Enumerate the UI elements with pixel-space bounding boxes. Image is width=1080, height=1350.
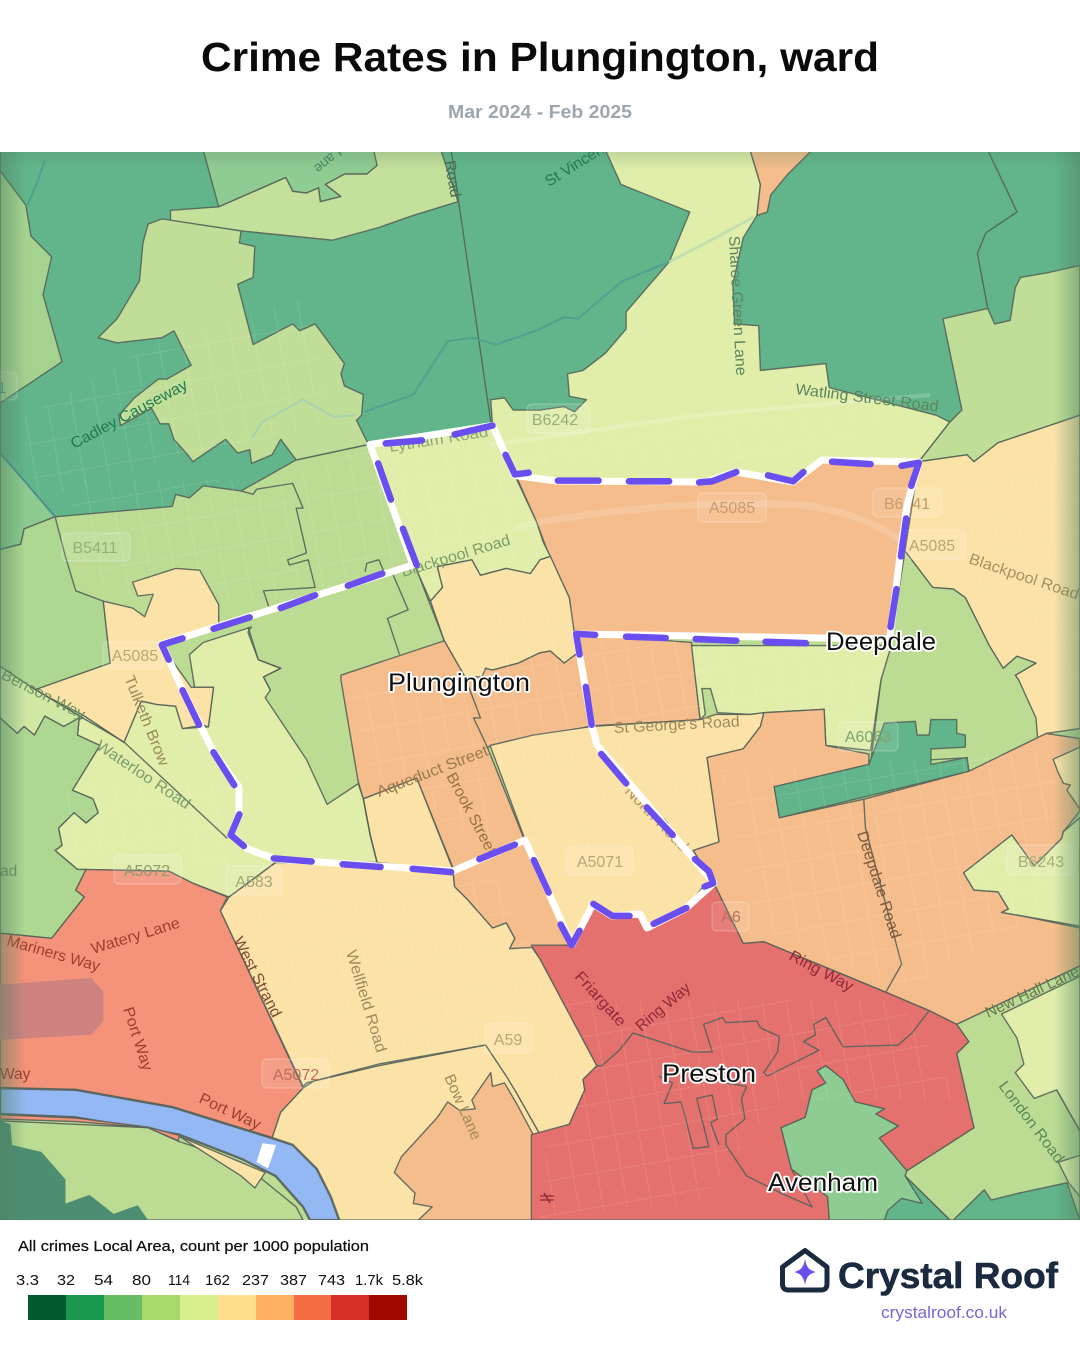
road and street labels: North Road bbox=[621, 783, 692, 855]
road and street labels: Ring Way bbox=[786, 948, 856, 996]
logo wordmark: Crystal Roof bbox=[838, 1255, 1059, 1296]
road and street labels: Deepdale Road bbox=[853, 829, 904, 941]
legend scale values bbox=[16, 1272, 424, 1289]
legend scale values: 114 bbox=[168, 1272, 190, 1289]
road and street labels: Mariners Way bbox=[5, 933, 102, 975]
road and street labels: Brook Street bbox=[442, 770, 500, 858]
website link: crystalroof.co.uk bbox=[881, 1304, 1008, 1322]
road number badges: A59 bbox=[494, 1032, 522, 1049]
ward boundary: Plungington bbox=[162, 426, 919, 945]
road number badges: A5072 bbox=[124, 863, 170, 880]
road and street labels: Sharoe Green Lane bbox=[725, 235, 749, 376]
road and street labels: Aqueduct Street bbox=[374, 742, 491, 801]
road and street labels: Road bbox=[441, 159, 464, 199]
road and street labels: New Hall Lane bbox=[983, 963, 1080, 1022]
road and street labels: Port Way bbox=[119, 1005, 156, 1073]
road and street labels: Tulketh Brow bbox=[120, 673, 172, 769]
street network texture bbox=[20, 300, 1080, 1218]
legend scale values: 1.7k bbox=[355, 1272, 383, 1289]
choropleth regions bbox=[0, 150, 1080, 1220]
road and street labels: West Strand bbox=[229, 934, 285, 1020]
road and street labels: Port Way bbox=[196, 1090, 264, 1134]
legend scale values: 54 bbox=[94, 1272, 113, 1289]
road number badges: A6 bbox=[721, 909, 741, 926]
road and street labels: ad bbox=[0, 863, 17, 880]
legend title: All crimes Local Area, count per 1000 population bbox=[18, 1238, 369, 1255]
road and street labels: Waterloo Road bbox=[93, 737, 193, 813]
road and street labels: St George's Road bbox=[613, 713, 740, 737]
road and street labels: Watery Lane bbox=[89, 915, 182, 958]
road and street labels: Blackpool Road bbox=[399, 532, 512, 581]
road number badges: A6063 bbox=[845, 729, 891, 746]
road and street labels bbox=[0, 138, 1080, 1167]
title: Crime Rates in Plungington, ward bbox=[201, 34, 879, 80]
legend scale values: 3.3 bbox=[16, 1272, 39, 1289]
road and street labels: Lytham Road bbox=[388, 424, 489, 456]
legend scale values: 5.8k bbox=[392, 1272, 424, 1289]
legend scale values: 80 bbox=[132, 1272, 151, 1289]
road and street labels: St Vincent bbox=[542, 138, 611, 190]
place labels bbox=[388, 628, 936, 1197]
road and street labels: Benson Way bbox=[0, 666, 88, 723]
road number badges: A5085 bbox=[909, 538, 955, 555]
subtitle: date range: Mar 2024 - Feb 2025 bbox=[448, 101, 632, 122]
road number badges bbox=[0, 372, 1075, 1088]
road and street labels: Wellfield Road bbox=[342, 948, 389, 1055]
icon: house with star bbox=[782, 1250, 827, 1290]
place labels: Plungington bbox=[388, 669, 530, 697]
place labels: Preston bbox=[662, 1060, 756, 1088]
water lines and internal boundaries bbox=[0, 150, 1080, 1207]
road number badges: B6242 bbox=[532, 412, 578, 429]
road and street labels: Lane bbox=[311, 145, 345, 177]
road and street labels: Watling Street Road bbox=[795, 381, 940, 416]
road number badges: A5085 bbox=[112, 648, 158, 665]
road number badges: A5085 bbox=[709, 500, 755, 517]
road and street labels: Ring Way bbox=[633, 979, 694, 1035]
legend scale values: 743 bbox=[318, 1272, 345, 1289]
logo: Crystal Roof bbox=[782, 1250, 1059, 1322]
road and street labels: Bow Lane bbox=[440, 1072, 484, 1143]
legend scale values: 32 bbox=[57, 1272, 75, 1289]
legend scale values: 237 bbox=[242, 1272, 269, 1289]
place labels: Avenham bbox=[768, 1169, 878, 1197]
road and street labels: Cadley Causeway bbox=[68, 376, 191, 453]
road and street labels: London Road bbox=[995, 1078, 1067, 1167]
road and street labels: Way bbox=[0, 1066, 31, 1083]
legend scale values: 162 bbox=[205, 1272, 230, 1289]
road number badges: B6243 bbox=[1018, 854, 1064, 871]
legend scale values: 387 bbox=[280, 1272, 307, 1289]
road number badges: A5072 bbox=[273, 1067, 319, 1084]
road number badges: A5071 bbox=[577, 854, 623, 871]
legend colour bar bbox=[28, 1295, 407, 1320]
road number badges: B6241 bbox=[884, 496, 930, 513]
road and street labels: Blackpool Road bbox=[967, 551, 1080, 603]
road number badges: A583 bbox=[235, 874, 273, 891]
legend bbox=[16, 1238, 424, 1320]
road number badges: B5411 bbox=[72, 540, 118, 557]
place labels: Deepdale bbox=[826, 628, 936, 656]
road and street labels: Friargate bbox=[571, 968, 629, 1030]
rail station icon bbox=[540, 1193, 554, 1203]
